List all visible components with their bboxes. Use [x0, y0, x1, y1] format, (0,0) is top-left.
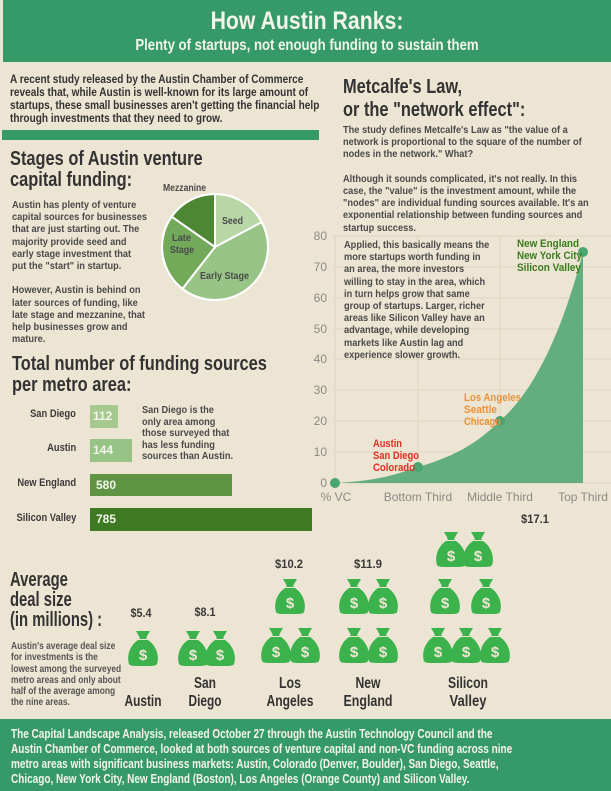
pie chart: Early Stage: [200, 270, 249, 282]
heading: funding sources: per metro area:: [12, 374, 131, 396]
pie chart: Stage: [170, 244, 194, 256]
area chart: network effect: Bottom Third: [384, 490, 452, 504]
area chart: network effect: Chicago: [464, 416, 501, 428]
money bag chart: $11.9: [354, 557, 382, 571]
area chart: network effect: [314, 229, 611, 504]
heading: average deal size: [10, 569, 102, 631]
bar note: sources than Austin.: [142, 450, 233, 462]
heading: metcalfe: or the "network effect":: [343, 99, 525, 121]
heading: stages: capital funding:: [10, 169, 132, 191]
bar note: [142, 404, 233, 462]
bar note: has less funding: [142, 438, 215, 450]
bar: New England: New England: [17, 477, 76, 489]
area chart: network effect: 30: [314, 383, 327, 397]
metcalfe text: [343, 124, 589, 234]
chart text: Applied, this basically means the more startups worth funding in an area, the more investors willing to stay in the area, which in turn helps grow that same group of startups. Larger, richer areas like Silicon Valley have an advantage, while developing markets like Austin lag and experience slower growth.: [344, 239, 489, 361]
area chart: network effect: % VC: [321, 490, 352, 504]
footer text: Austin Chamber of Commerce, looked at both sources of venture capital and non-VC funding across nine: [11, 742, 512, 756]
heading: metcalfe: [343, 76, 525, 121]
footer band: [0, 719, 611, 791]
area chart: network effect: 20: [314, 414, 327, 428]
bar chart: funding sources: 144: [93, 443, 113, 457]
bar: Silicon Valley: Silicon Valley: [16, 512, 76, 524]
slice: early stage: [182, 222, 268, 300]
heading: stages: Stages of Austin venture: [10, 148, 203, 170]
intro text: startups, these small businesses aren't getting the financial help: [10, 98, 319, 112]
money bag chart: England: [344, 693, 392, 710]
money bag chart: $17.1: [521, 512, 549, 526]
bar: San Diego: San Diego: [30, 408, 76, 420]
money bag chart: Angeles: [266, 693, 314, 710]
area chart: network effect: Colorado: [373, 462, 415, 474]
header band: [3, 0, 611, 62]
bar note: those surveyed that: [142, 427, 229, 439]
deal size text: Austin's average deal size: [11, 641, 115, 652]
deal size text: half of the average among: [11, 686, 115, 697]
bar: Austin: Austin: [47, 442, 76, 454]
bar note: only area among: [142, 416, 215, 428]
bags: [128, 631, 158, 666]
heading: average deal size: (in millions) :: [10, 609, 102, 631]
metcalfe text: The study defines Metcalfe's Law as "the value of a network is proportional to the square of the number of nodes in the network." What?: [343, 124, 582, 160]
pie chart: Seed: [222, 215, 243, 227]
deal size text: lowest among the surveyed: [11, 664, 121, 675]
area chart: network effect: Los Angeles: [464, 392, 521, 404]
deal size text: the nine areas.: [11, 697, 70, 708]
bar chart: funding sources: 785: [96, 512, 116, 526]
deal size text: [11, 641, 121, 708]
area chart: network effect: New England: [517, 238, 579, 250]
money bag chart: Valley: [450, 693, 487, 710]
deal size text: metro areas and only about: [11, 675, 121, 686]
bar chart: funding sources: 112: [93, 409, 112, 423]
slice: seed: [215, 194, 262, 247]
title: How Austin Ranks:: [211, 7, 403, 35]
money bag chart: Diego: [188, 693, 222, 710]
stages text: Austin has plenty of venture capital sources for businesses that are just starting out. The majority provide seed and early stage investment that put the "start" in startup.: [12, 199, 147, 272]
pie label: mezzanine: Mezzanine: [163, 182, 206, 194]
deal size text: for investments is the: [11, 652, 98, 663]
area chart: network effect: New York City: [517, 250, 583, 262]
money bag chart: Silicon: [448, 675, 488, 692]
heading: average deal size: Average: [10, 569, 68, 591]
bar chart: funding sources: [16, 405, 312, 531]
money bag chart: San: [194, 675, 216, 692]
metcalfe text: Although it sounds complicated, it's not really. In this case, the "value" is the investment amount, while the "nodes" are individual funding sources available. It's an exponential relationship between funding sources and startup success.: [343, 173, 589, 234]
area chart: network effect: 70: [314, 260, 327, 274]
intro text: reveals that, while Austin is well-known for its large amount of: [10, 85, 308, 99]
area chart: network effect: Silicon Valley: [517, 262, 582, 274]
footer text: metro areas with significant business markets: Austin, Colorado (Denver, Boulder), San Diego, Seattle,: [11, 757, 499, 771]
area chart: network effect: 50: [314, 322, 327, 336]
intro text: through investments that they need to grow.: [10, 111, 222, 125]
footer text: Chicago, New York City, New England (Boston), Los Angeles (Orange County) and Silicon Valley.: [11, 772, 469, 786]
area chart: network effect: Middle Third: [467, 490, 533, 504]
money bag chart: Austin: [124, 693, 162, 710]
footer text: The Capital Landscape Analysis, released October 27 through the Austin Technology Council and the: [11, 727, 492, 741]
heading: stages: [10, 148, 203, 191]
area chart: network effect: 40: [314, 352, 327, 366]
money bag chart: New: [356, 675, 381, 692]
area chart: network effect: Seattle: [464, 404, 497, 416]
heading: funding sources: [12, 353, 267, 396]
area chart: network effect: Austin: [373, 438, 402, 450]
stages text: [12, 199, 147, 345]
area chart: network effect: Top Third: [558, 490, 608, 504]
heading: metcalfe: Metcalfe's Law,: [343, 76, 462, 98]
footer text: [11, 727, 512, 786]
slice: late stage: [162, 217, 215, 289]
subtitle: Plenty of startups, not enough funding to sustain them: [135, 37, 479, 54]
area chart: network effect: 10: [314, 445, 327, 459]
bar chart: funding sources: 580: [96, 478, 116, 492]
pie chart: [161, 193, 269, 301]
slice: mezzanine: [172, 194, 215, 247]
divider bar: [2, 130, 319, 140]
money bag chart: Los: [279, 675, 301, 692]
area chart: network effect: 80: [314, 229, 327, 243]
money bag chart: $8.1: [194, 605, 216, 619]
money bag chart: $10.2: [275, 557, 303, 571]
pie chart: Late: [172, 232, 191, 244]
bar note: San Diego is the: [142, 404, 214, 416]
stages text: However, Austin is behind on later sources of funding, like late stage and mezzanine, that help businesses grow and mature.: [12, 284, 145, 345]
intro text: A recent study released by the Austin Chamber of Commerce: [10, 72, 303, 86]
area chart: network effect: 0: [320, 476, 327, 490]
intro text: [10, 72, 319, 125]
area chart: network effect: San Diego: [373, 450, 419, 462]
money bag chart: [124, 512, 549, 710]
curve area: [335, 252, 583, 483]
area chart: network effect: 60: [314, 291, 327, 305]
heading: funding sources: Total number of funding sources: [12, 353, 267, 375]
money bag chart: $5.4: [130, 606, 152, 620]
heading: average deal size: deal size: [10, 589, 72, 611]
